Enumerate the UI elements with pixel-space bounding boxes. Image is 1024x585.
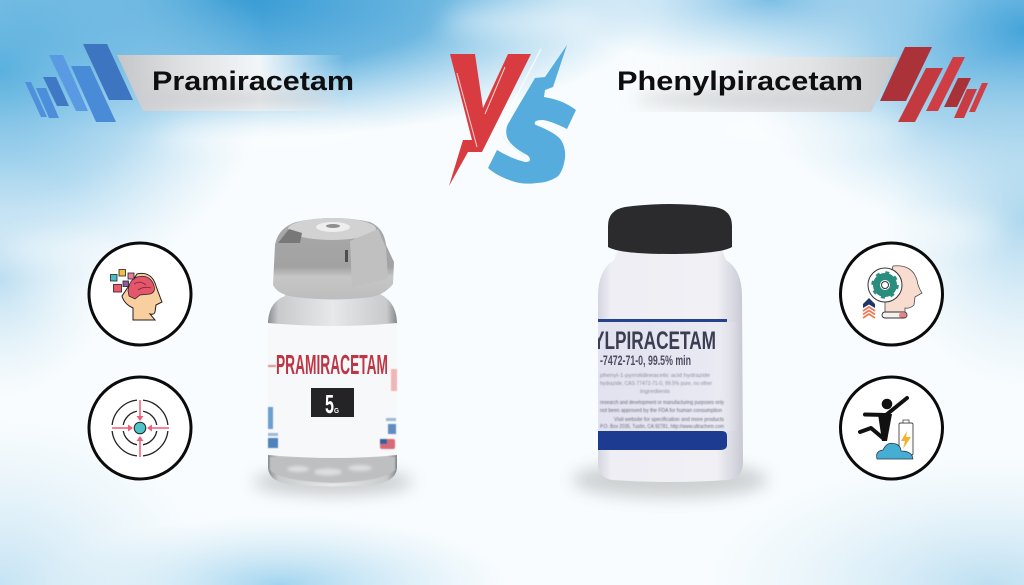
letter S xyxy=(488,45,576,184)
vial side print and flag xyxy=(268,365,397,449)
bottle label: Visit website for specification and more products xyxy=(614,417,725,423)
vial cap xyxy=(273,218,394,300)
right title banner xyxy=(610,57,898,112)
icon circle: target focus xyxy=(89,377,191,479)
product: Phenylpiracetam bottle xyxy=(572,204,768,498)
bottle body xyxy=(598,250,743,482)
icon: red bars xyxy=(880,47,988,122)
icon circle: brain xyxy=(89,243,191,345)
left banner shading xyxy=(145,89,335,107)
vial shadow xyxy=(253,469,413,495)
bottle label: hydrazide, CAS 77472-71-0, 99.5% pure, no other xyxy=(600,381,712,387)
vial 5G badge: G xyxy=(334,408,340,415)
icon circle: cognitive gear head xyxy=(840,243,942,345)
icon: blue bars xyxy=(25,44,133,122)
vial label xyxy=(268,323,397,458)
right banner shading xyxy=(635,90,855,108)
right banner label: Phenylpiracetam xyxy=(617,66,863,96)
letter V xyxy=(449,54,531,186)
left banner label: Pramiracetam xyxy=(152,66,354,96)
bottle label: not been approved by the FDA for human consumption xyxy=(600,408,722,414)
vial 5G badge: 5 xyxy=(325,389,334,419)
left title banner xyxy=(117,55,354,111)
bottle label xyxy=(598,319,727,450)
icon circle: energy jump xyxy=(840,377,942,479)
bottle shadow xyxy=(572,462,768,498)
vial glass body xyxy=(268,294,397,486)
vial powder xyxy=(270,457,395,483)
slash highlight xyxy=(502,49,541,124)
bottle label: YLPIRACETAM xyxy=(593,327,716,355)
bottle cap xyxy=(608,204,732,254)
bottle label: phenyl-1-pyrrolidineacetic acid hydrazide xyxy=(600,373,710,379)
product: Pramiracetam vial: PRAMIRACETAM xyxy=(276,349,388,380)
bottle label: research and development or manufacturing purposes only xyxy=(600,400,724,406)
bottle label: -7472-71-0, 99.5% min xyxy=(600,352,691,368)
product: Pramiracetam vial xyxy=(253,218,413,495)
bottle label: P.O. Box 2035, Tustin, CA 92781, http://www.ultrachem.com xyxy=(600,424,724,430)
bottle label: ingredients xyxy=(640,389,671,395)
vial 5G badge xyxy=(311,388,354,419)
VS emblem xyxy=(449,45,576,186)
